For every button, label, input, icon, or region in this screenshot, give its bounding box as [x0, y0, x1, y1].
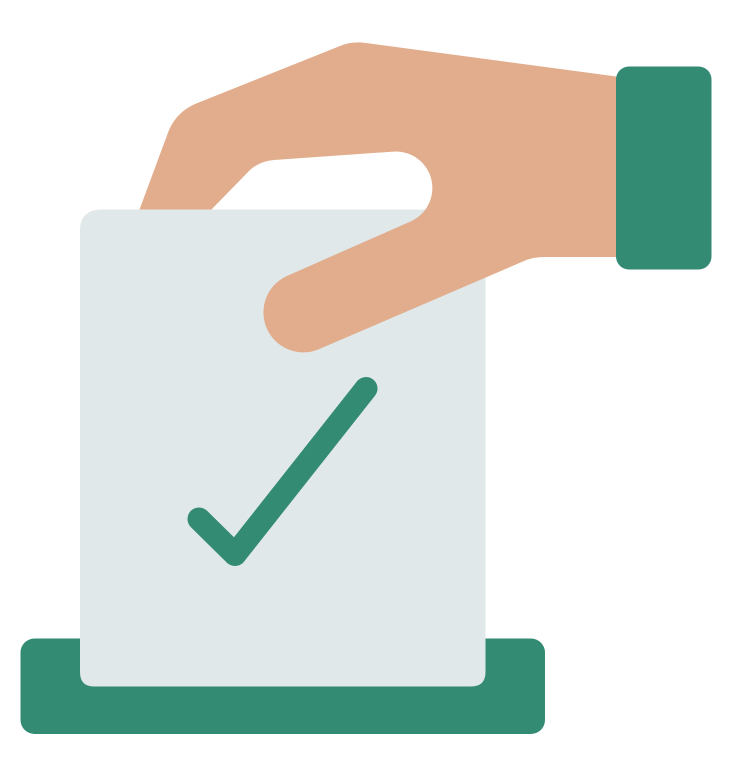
ballot box slot — [20, 638, 545, 734]
check mark — [199, 388, 366, 554]
ballot paper — [80, 210, 486, 686]
hand with thumb and fingers — [140, 42, 620, 352]
sleeve cuff — [616, 66, 712, 270]
